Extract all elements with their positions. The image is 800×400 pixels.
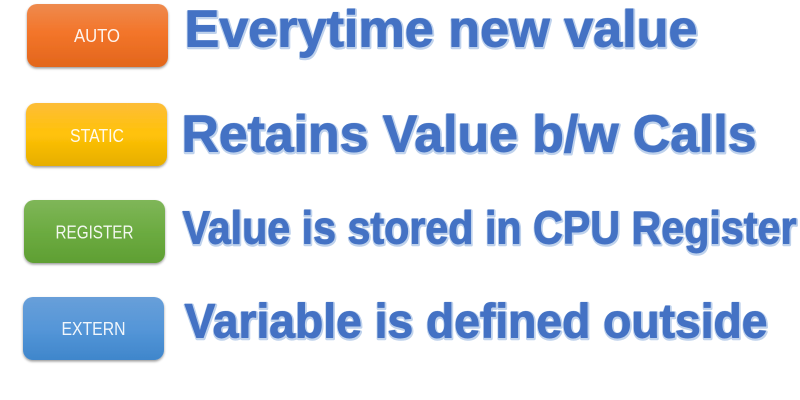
- button: EXTERN: [23, 297, 164, 360]
- button: EXTERN: EXTERN: [62, 319, 126, 339]
- heading: Everytime new value: Everytime new value: [184, 0, 698, 58]
- button: AUTO: AUTO: [74, 26, 120, 46]
- heading: Variable is defined outside: Variable is defined outside: [184, 296, 768, 348]
- button: AUTO: [27, 4, 168, 67]
- button: STATIC: STATIC: [70, 126, 124, 146]
- heading: Variable is defined outside: Variable is defined outside: [185, 296, 768, 350]
- heading: Retains Value b/w Calls: Retains Value b/w Calls: [182, 106, 757, 164]
- heading: Retains Value b/w Calls: Retains Value b/w Calls: [182, 106, 756, 164]
- heading: Everytime new value: Everytime new value: [185, 2, 698, 60]
- button: REGISTER: [24, 200, 165, 263]
- button: STATIC: [26, 103, 167, 166]
- button: REGISTER: REGISTER: [56, 222, 134, 242]
